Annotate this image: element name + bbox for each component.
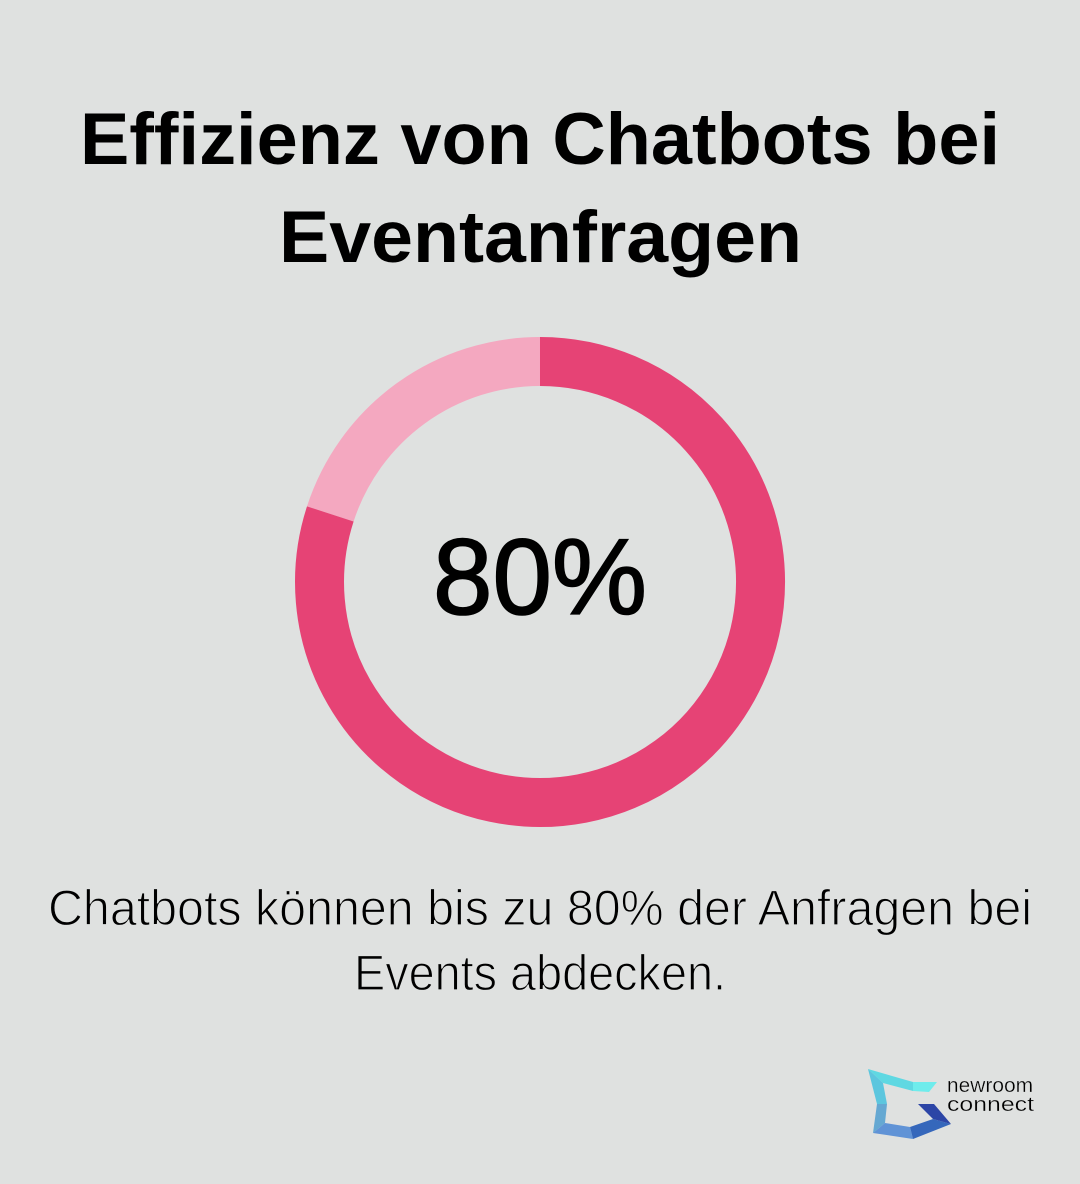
logo wordmark: newroom bbox=[947, 1075, 1033, 1097]
segment: remaining 20% bbox=[330, 362, 540, 514]
donut chart: 80% bbox=[320, 362, 761, 802]
donut value: 80% bbox=[433, 516, 647, 637]
logo: newroom connect bbox=[868, 1069, 1035, 1139]
title bbox=[80, 99, 1000, 278]
title: Eventanfragen bbox=[279, 197, 802, 278]
description text: Events abdecken. bbox=[354, 945, 726, 1001]
segment: 80% bbox=[320, 362, 761, 802]
title: Effizienz von Chatbots bei bbox=[80, 99, 1000, 180]
description text bbox=[48, 880, 1032, 1001]
description text: Chatbots können bis zu 80% der Anfragen bei bbox=[48, 880, 1032, 936]
logo wordmark bbox=[947, 1075, 1035, 1116]
logo mark bbox=[868, 1069, 951, 1139]
logo wordmark: connect bbox=[947, 1094, 1035, 1116]
